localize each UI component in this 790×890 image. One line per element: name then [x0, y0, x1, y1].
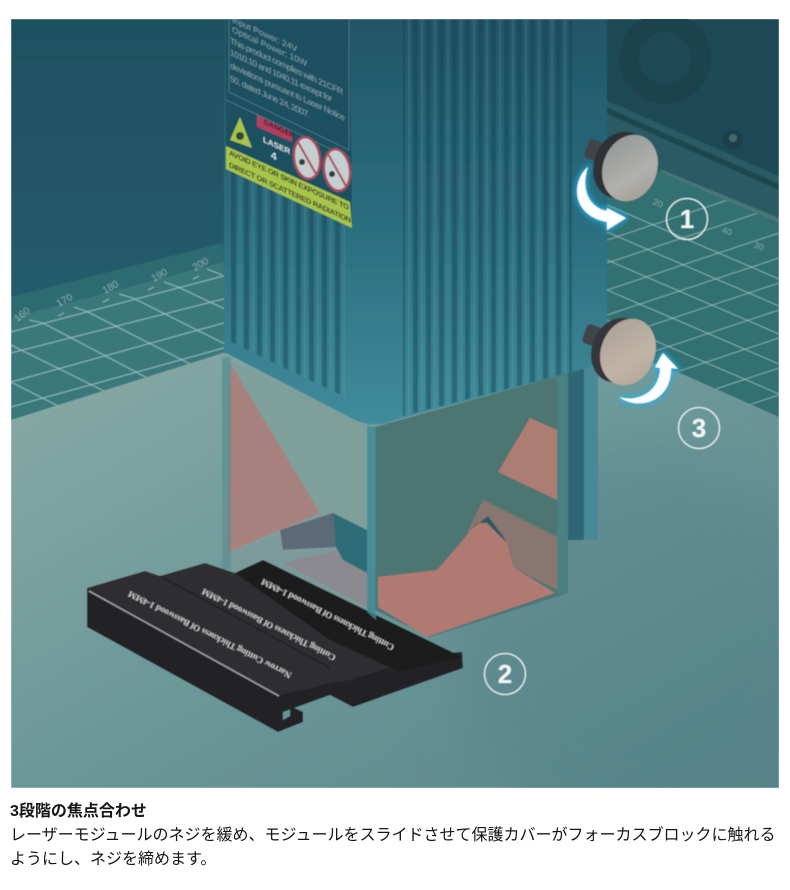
- table surface: [11, 345, 779, 788]
- cutting mat, right: [606, 171, 779, 416]
- caption body: ようにし、ネジを締めます。: [10, 851, 216, 868]
- arrow: loosen screw: [577, 167, 626, 230]
- compliance text: This product complies with 21CFR: [230, 35, 344, 97]
- cutting mat, left: 170: [55, 292, 75, 310]
- step marker 1: [666, 198, 708, 240]
- transparent cover, right pane: [375, 373, 568, 637]
- danger tag: DANGER: [264, 117, 295, 140]
- focus block: [87, 560, 463, 732]
- icon: no eye exposure: [291, 135, 323, 181]
- block engraved labels: Narrow Cutting Thickness Of Basswood 1-4MM: [126, 589, 293, 680]
- label outline: [226, 19, 350, 158]
- cutting mat, left: [11, 243, 227, 420]
- cutting mat, right: 40: [721, 225, 733, 238]
- compliance text: 1010.10 and 1040.11 except for: [230, 47, 332, 104]
- cutting mat, right: 20: [652, 197, 664, 210]
- caption: [10, 802, 775, 868]
- cutting mat, left: 190: [150, 267, 170, 285]
- compliance text: 50, dated June 24, 2007.: [230, 73, 310, 120]
- adjustment knob, upper: [584, 132, 659, 202]
- compliance text: Optical Power: 10W: [232, 24, 308, 69]
- block top faces: [87, 562, 388, 694]
- step marker 1: 1: [680, 204, 694, 234]
- step marker 3: 3: [692, 413, 706, 443]
- warning strip text: DIRECT OR SCATTERED RADIATION: [229, 160, 351, 225]
- caption body: [10, 826, 775, 868]
- compliance text: [230, 14, 345, 123]
- warning label: [226, 14, 353, 228]
- compliance text: deviations pursuant to Laser Notice: [230, 60, 345, 123]
- danger tag: LASER: [263, 134, 290, 156]
- transparent cover, left pane: [222, 357, 367, 610]
- caption heading: 3段階の焦点合わせ: [10, 803, 147, 820]
- laser module body: [224, 19, 607, 424]
- danger tag: 4: [271, 149, 277, 163]
- cooling fins, left face: [230, 172, 345, 396]
- background wall: [11, 19, 779, 420]
- machinery at top right: [607, 19, 779, 223]
- danger tag: [257, 115, 295, 163]
- cover front corner: [367, 426, 376, 620]
- icon: no skin exposure: [321, 147, 353, 193]
- block front faces: [87, 588, 463, 732]
- warning strip text: AVOID EYE OR SKIN EXPOSURE TO: [229, 148, 349, 212]
- arrow: tighten screw: [619, 353, 678, 403]
- table shading: [473, 464, 779, 788]
- icon: laser hazard triangle: [230, 117, 252, 148]
- compliance text: Input Power: 24V: [232, 14, 297, 54]
- cutting mat, right: 30: [753, 240, 765, 253]
- block engraved labels: [126, 576, 396, 680]
- adjustment knob, lower: [582, 317, 657, 386]
- cutting mat, left: 160: [12, 305, 33, 325]
- step marker 2: [484, 654, 526, 694]
- step marker 3: [678, 408, 720, 448]
- block engraved labels: Cutting Thickness Of Basswood 1-4MM: [259, 576, 396, 653]
- caption body: レーザーモジュールのネジを緩め、モジュールをスライドさせて保護カバーがフォーカスブロックに触れる: [10, 827, 775, 844]
- cutting mat, left: 200: [191, 256, 211, 274]
- rear support bar: [568, 362, 598, 540]
- cutting mat, left: 180: [101, 279, 121, 297]
- block engraved labels: Cutting Thickness Of Basswood 1-4MM: [200, 586, 337, 663]
- step marker 2: 2: [498, 659, 512, 689]
- cooling fins, right face: [403, 19, 572, 416]
